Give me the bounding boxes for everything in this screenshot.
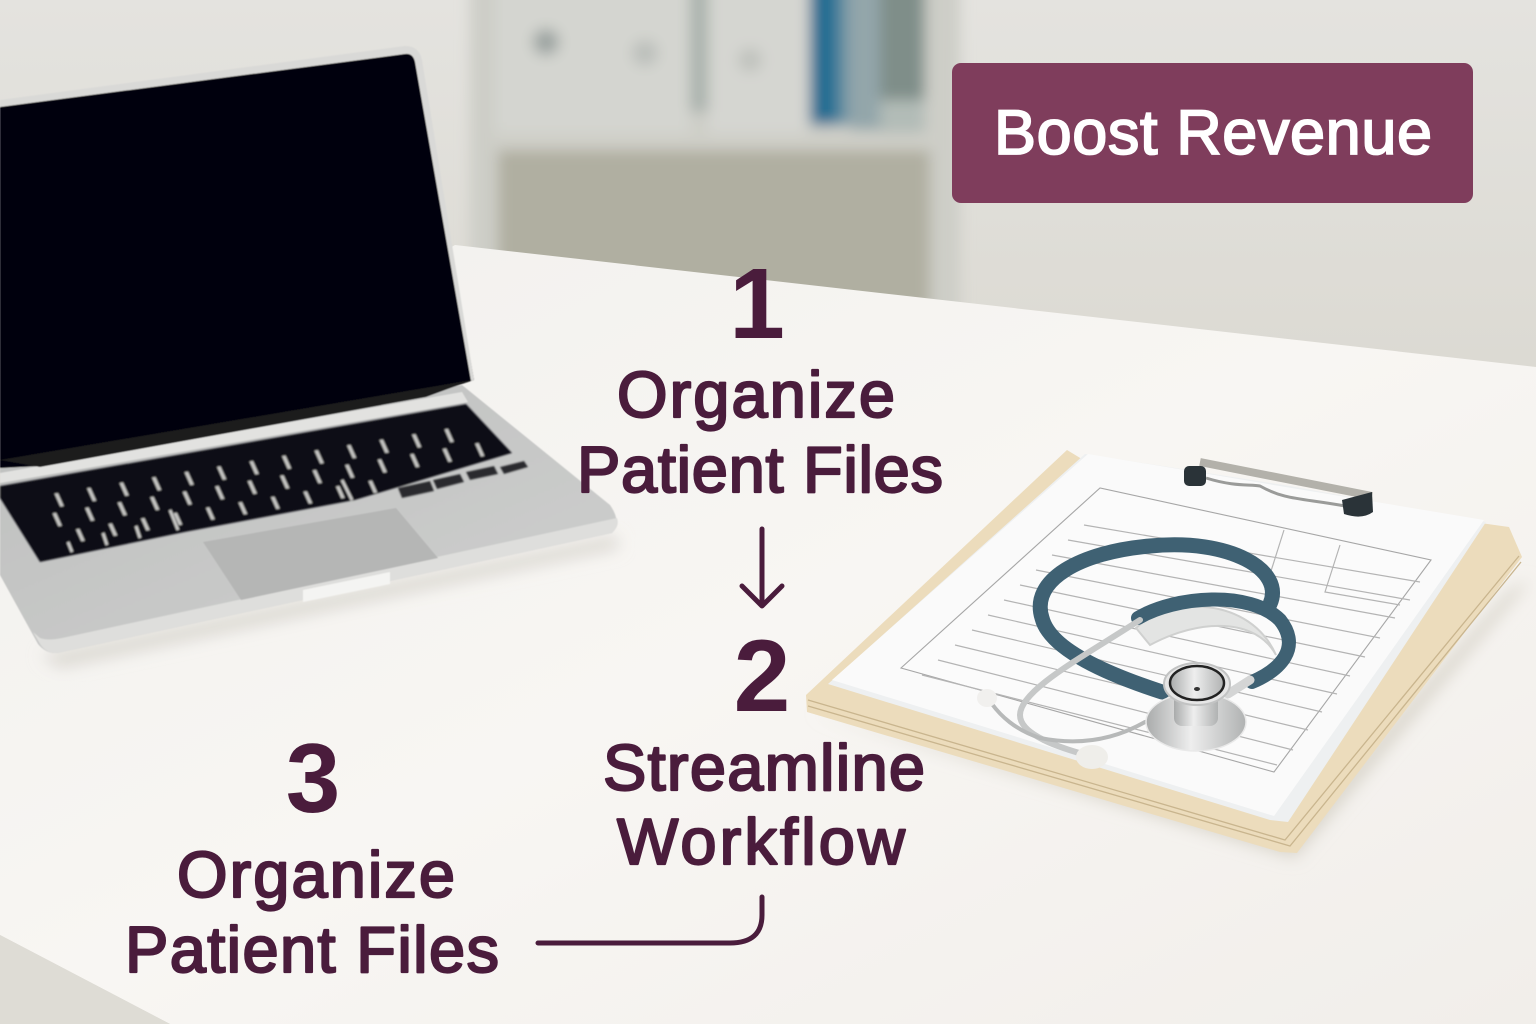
step 3: 3 [286, 723, 340, 833]
silver strip above keyboard [0, 392, 468, 483]
step 1: 1 [729, 248, 785, 360]
step 1: Organize [617, 358, 895, 431]
laptop base [0, 385, 617, 653]
arrow: step 1 to step 2 [742, 529, 782, 606]
key gaps [35, 430, 496, 540]
ear tips [977, 689, 997, 707]
laptop [0, 46, 620, 668]
chest piece [1146, 693, 1246, 751]
keyboard [0, 404, 528, 562]
step 2: Streamline [603, 731, 925, 804]
laptop screen [0, 50, 474, 468]
step 3: Organize [177, 838, 455, 911]
step 2: Workflow [617, 805, 906, 878]
folder page edges [808, 556, 1521, 846]
folder shadow [810, 580, 1530, 858]
metal tube [1020, 620, 1140, 756]
trackpad [203, 508, 438, 600]
latch [303, 572, 390, 602]
step 3: Patient Files [125, 913, 499, 986]
step 2 [603, 619, 925, 878]
step 1: Patient Files [577, 433, 943, 506]
laptop shadow [40, 535, 620, 668]
screen bezel edge [0, 46, 474, 381]
badge: Boost Revenue: Boost Revenue [994, 98, 1432, 168]
blurred shelf [470, 0, 960, 320]
tube inner loop [1138, 599, 1289, 682]
desk surface [0, 245, 1536, 1024]
step 1 [577, 248, 943, 506]
desk front edge [0, 935, 170, 1024]
arrow: step 2 to step 3 [538, 897, 762, 943]
step 2: 2 [734, 619, 790, 733]
paper stack [828, 454, 1486, 822]
badge: Boost Revenue [952, 63, 1473, 203]
patient form [901, 488, 1431, 772]
stethoscope [992, 545, 1289, 756]
clipboard with patient files [806, 450, 1530, 858]
step 3 [125, 723, 499, 986]
folder [806, 450, 1522, 853]
small keys [466, 466, 498, 480]
silver crescent [1136, 607, 1276, 655]
laptop front lip [33, 518, 618, 653]
tube outer loop [1040, 545, 1272, 692]
clip [1184, 462, 1373, 517]
hinge [0, 380, 472, 467]
